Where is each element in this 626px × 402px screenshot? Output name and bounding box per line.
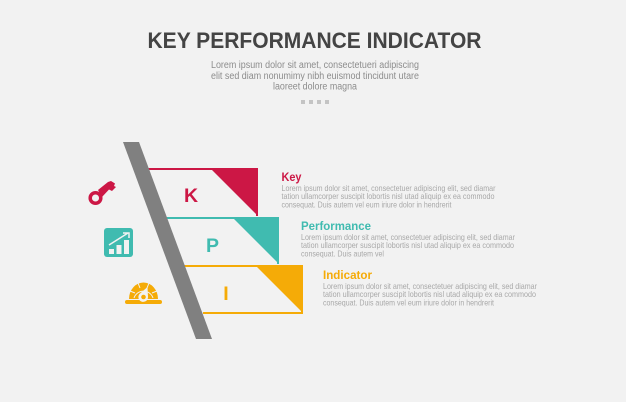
letter P: P [206, 235, 219, 257]
panel: I [184, 265, 303, 313]
text block: Key: consequat. Duis autem vel eum iriure dolor in hendrerit [282, 200, 452, 210]
text block: Indicator: Indicator [323, 270, 373, 282]
text block: Key: Key [282, 172, 302, 184]
icon: helmet gauge [125, 282, 162, 304]
panel: K [148, 168, 258, 216]
icon: key [90, 181, 116, 203]
text block: Performance: Performance [301, 221, 371, 233]
text block: Indicator: Lorem ipsum dolor sit amet, consectetuer adipiscing elit, sed diamar [323, 281, 537, 291]
text block: Indicator: tation ullamcorper suscipit lobortis nisl utad aliquip ex ea commodo [323, 289, 536, 299]
subtitle: elit sed diam nonumimy nibh euismod tincidunt utare [211, 71, 419, 82]
text block: Key: tation ullamcorper suscipit lobortis nisl utad aliquip ex ea commodo [282, 191, 495, 201]
panel: P [166, 217, 279, 264]
text block: Key: Lorem ipsum dolor sit amet, consectetuer adipiscing elit, sed diamar [282, 183, 496, 193]
subtitle: Lorem ipsum dolor sit amet, consectetueri adipiscing [211, 60, 419, 71]
text block: Performance [301, 221, 515, 258]
icon: growth chart [104, 228, 133, 257]
letter K: K [184, 185, 198, 207]
subtitle [211, 60, 419, 92]
text block: Performance: consequat. Duis autem vel [301, 248, 384, 258]
pagination dots [301, 100, 329, 104]
text block: Indicator [323, 270, 537, 308]
text block: Performance: Lorem ipsum dolor sit amet, consectetuer adipiscing elit, sed diamar [301, 232, 515, 242]
text block: Key [282, 172, 496, 210]
letter I: I [223, 283, 229, 305]
text block: Indicator: consequat. Duis autem vel eum iriure dolor in hendrerit [323, 298, 495, 308]
title: KEY PERFORMANCE INDICATOR [148, 28, 482, 53]
slanted grey bar [123, 142, 212, 339]
text block: Performance: tation ullamcorper suscipit lobortis nisl utad aliquip ex ea commodo [301, 240, 514, 250]
subtitle: laoreet dolore magna [273, 82, 357, 92]
